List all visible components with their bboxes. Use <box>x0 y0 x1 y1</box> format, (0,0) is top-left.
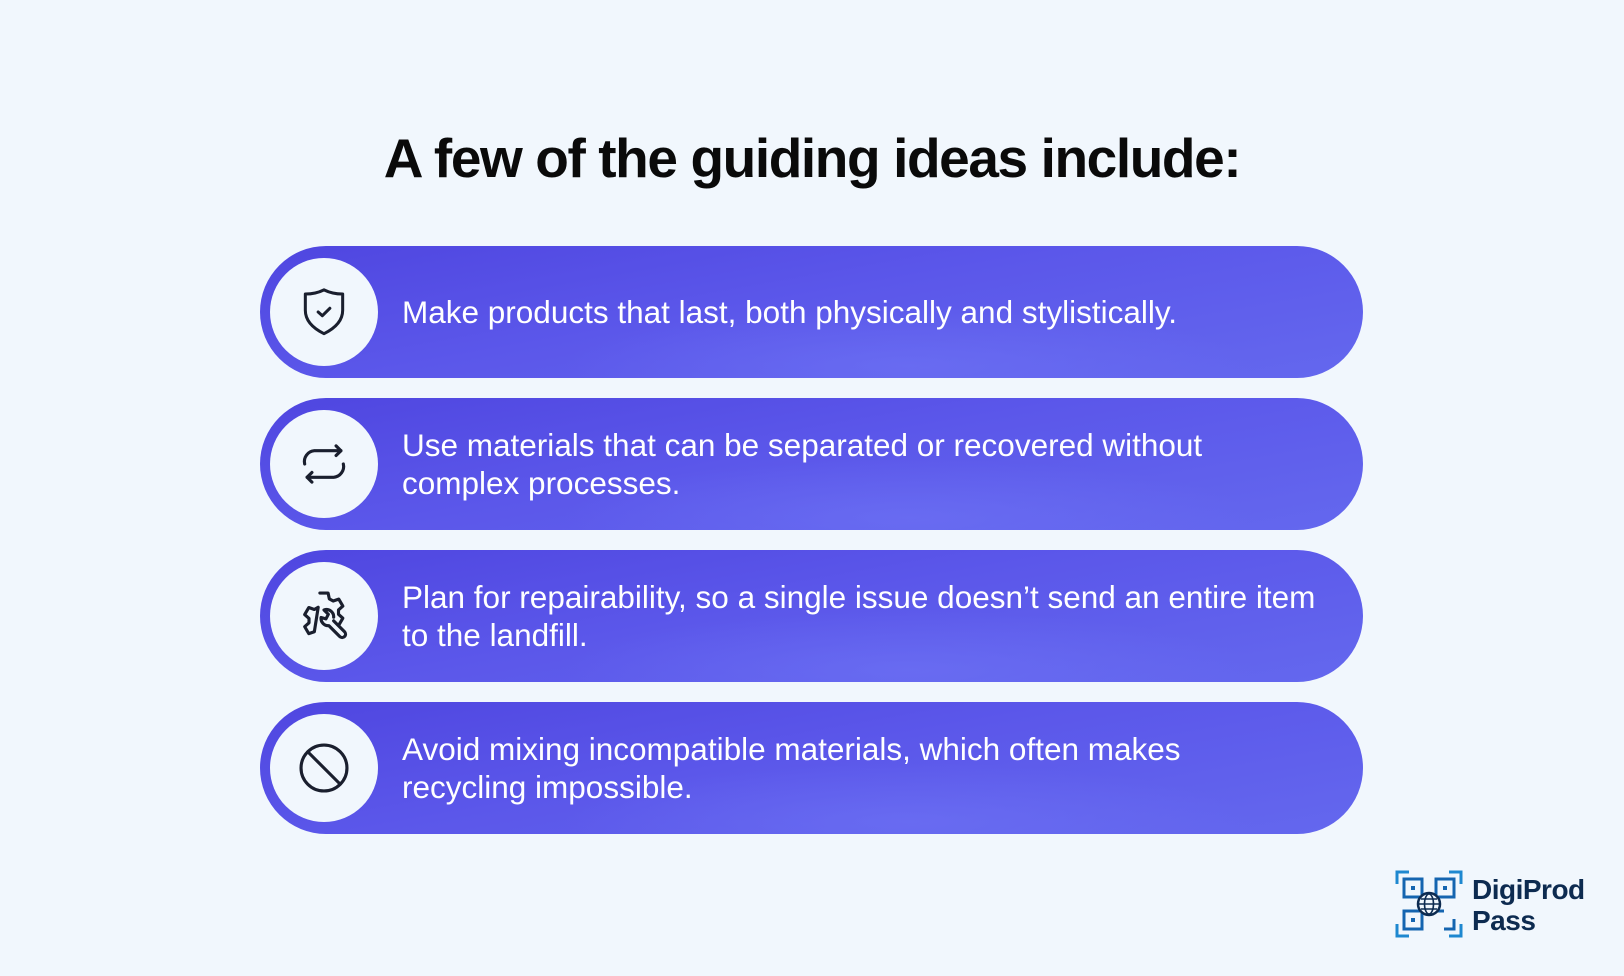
text 4 <box>402 731 1181 805</box>
text 2: complex processes. <box>402 465 680 501</box>
icon: repeat <box>270 410 378 518</box>
panel: item 1 <box>260 246 1363 378</box>
text 3: to the landfill. <box>402 617 588 653</box>
text 3: Plan for repairability, so a single issue doesn’t send an entire item <box>402 579 1315 615</box>
logo text: DigiProd <box>1472 874 1585 905</box>
text 4: Avoid mixing incompatible materials, which often makes <box>402 731 1181 767</box>
text 1: Make products that last, both physically and stylistically. <box>402 294 1177 330</box>
panel: item 4 <box>260 702 1363 834</box>
icon: prohibited <box>270 714 378 822</box>
text 2 <box>402 427 1202 501</box>
title: A few of the guiding ideas include: <box>384 127 1240 189</box>
icon: gear wrench <box>270 562 378 670</box>
panel: item 3 <box>260 550 1363 682</box>
logo text: Pass <box>1472 905 1535 936</box>
text 3 <box>402 579 1315 653</box>
logo text <box>1472 874 1585 936</box>
text 4: recycling impossible. <box>402 769 693 805</box>
logo <box>1396 870 1585 938</box>
icon: qr globe <box>1396 870 1462 938</box>
text 2: Use materials that can be separated or recovered without <box>402 427 1202 463</box>
icon: shield check <box>270 258 378 366</box>
panel: item 2 <box>260 398 1363 530</box>
